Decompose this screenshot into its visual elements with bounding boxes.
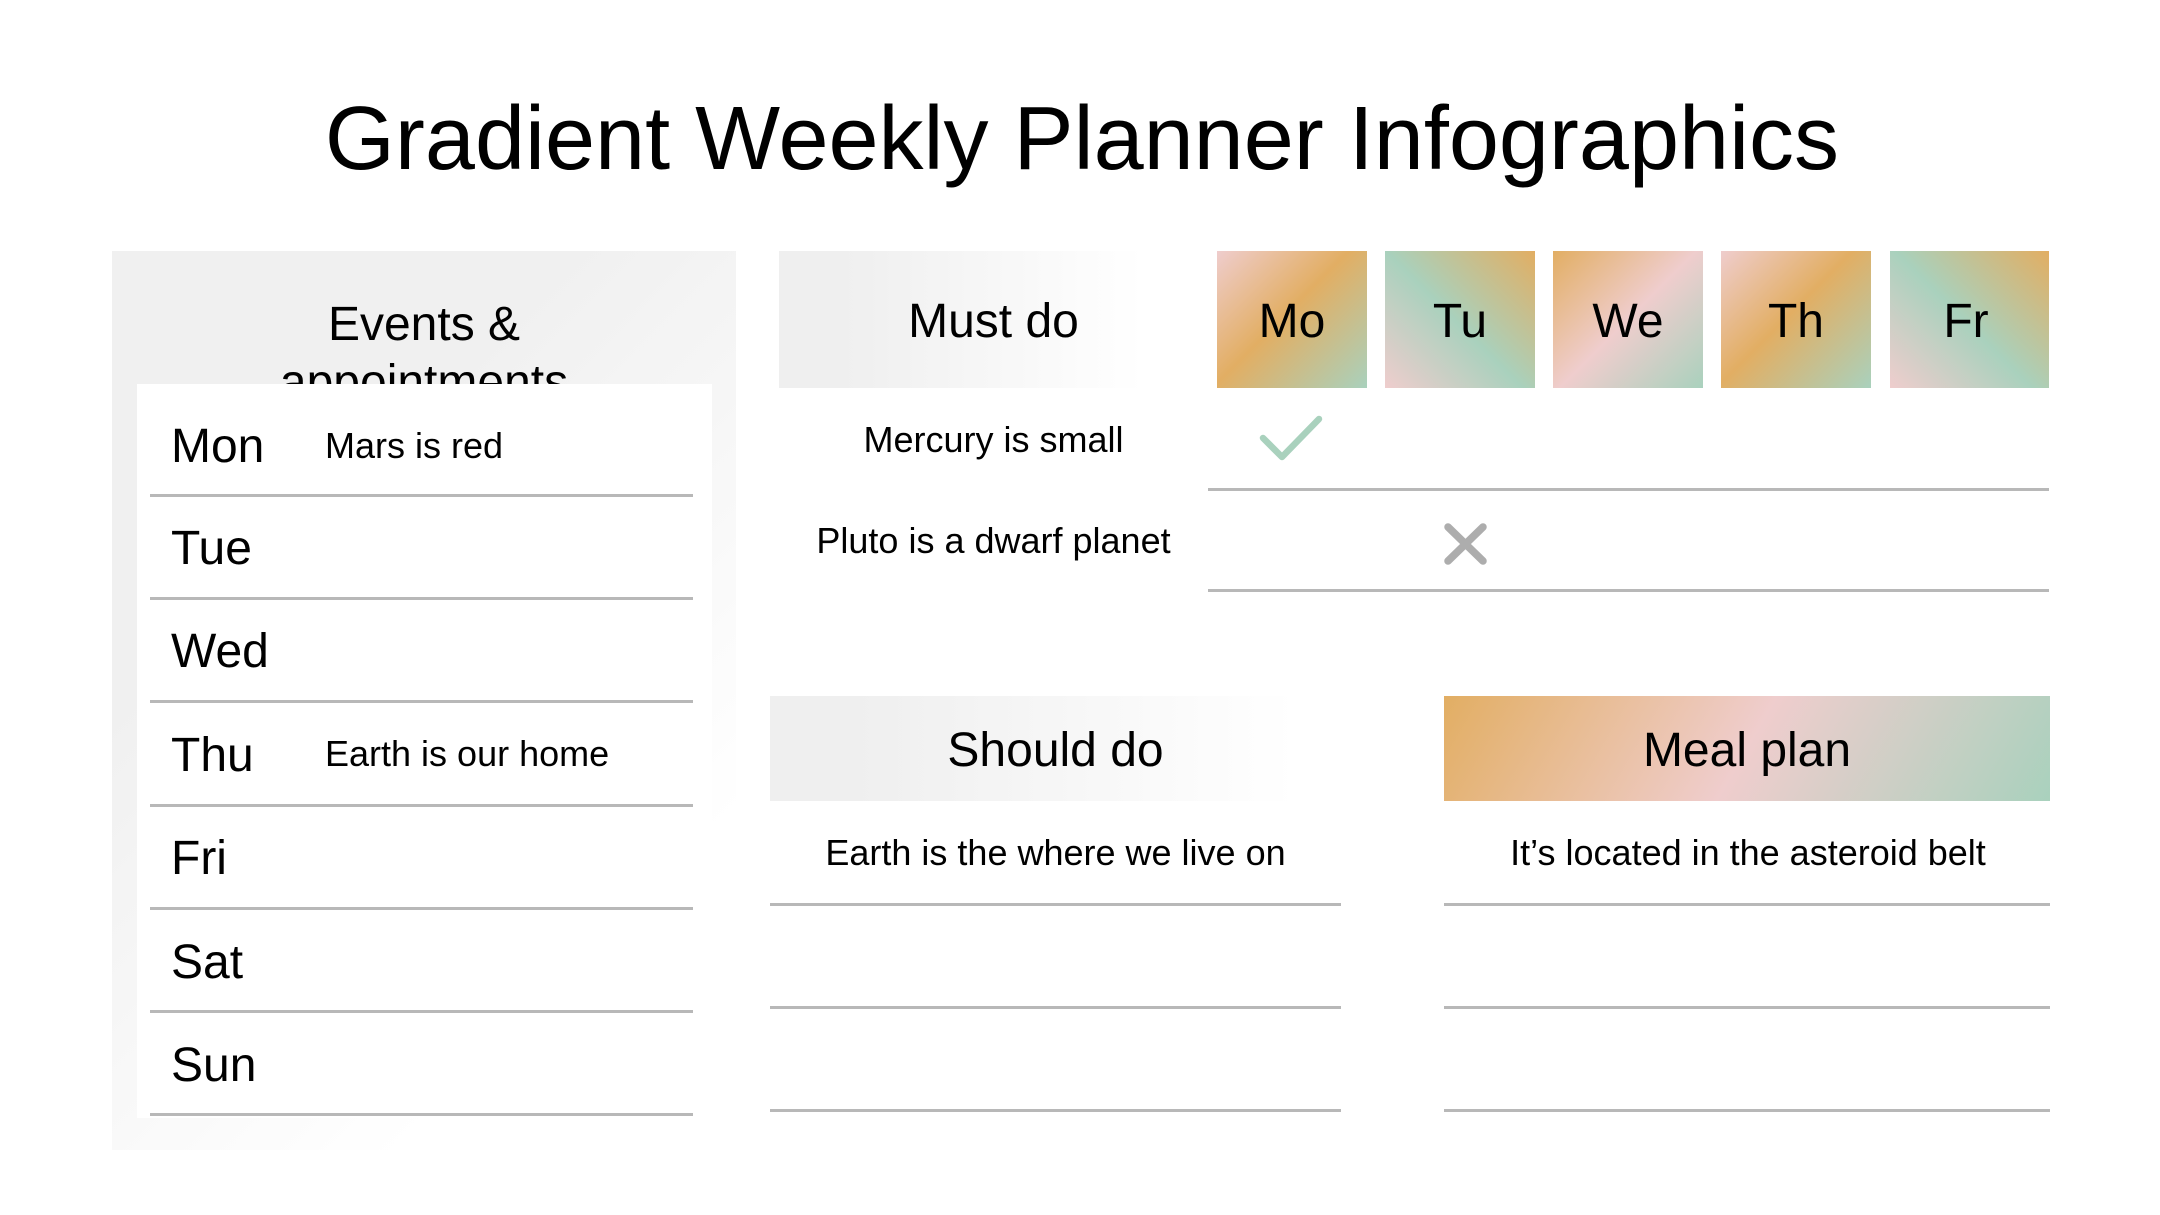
day label: Mon [171,420,264,473]
meal text: It’s located in the asteroid belt [1510,832,1986,873]
day label: Sat [171,936,243,989]
day label: Thu [171,729,254,782]
heading: should do [770,696,1341,801]
row: Sunday [150,1039,693,1116]
row: Tuesday [150,522,693,600]
row: Thursday [150,729,693,807]
title: Gradient Weekly Planner Infographics [325,89,1839,189]
heading: meal plan [1444,696,2050,801]
event text: Earth is our home [325,733,609,774]
icon: check mark [1260,416,1322,460]
day header: Th: Th [1768,295,1824,348]
day header: Tu [1385,251,1535,388]
row: Saturday [150,936,693,1013]
heading: events and appointments [280,298,568,409]
row: Friday [150,832,693,910]
day header: Mo: Mo [1259,295,1325,348]
day label: Sun [171,1039,256,1092]
heading: must do [779,251,1208,388]
day header: Fr [1890,251,2049,388]
day header: Tu: Tu [1433,295,1487,348]
panel: events and appointments [112,251,736,1150]
day header: Fr: Fr [1943,295,1989,348]
heading: should do: Should do [947,724,1164,777]
day label: Fri [171,832,227,885]
event text: Mars is red [325,425,503,466]
heading: meal plan: Meal plan [1643,724,1851,777]
task: Mercury is small: Mercury is small [863,419,1124,460]
day label: Tue [171,522,252,575]
heading: events and appointments: Events & [328,298,520,351]
row: Wednesday [150,625,693,703]
icon: cross mark [1444,523,1487,565]
day header: We [1553,251,1703,388]
heading: events and appointments: appointments [280,356,568,409]
day label: Wed [171,625,269,678]
day header: Mo [1217,251,1367,388]
day header: We: We [1592,295,1664,348]
row: Monday [150,420,693,497]
weekly list card [137,384,712,1118]
task: Pluto is a dwarf planet: Pluto is a dwarf planet [816,520,1171,561]
heading: must do: Must do [908,295,1079,348]
day header: Th [1721,251,1871,388]
task: Earth is the where we live on: Earth is the where we live on [825,832,1286,873]
